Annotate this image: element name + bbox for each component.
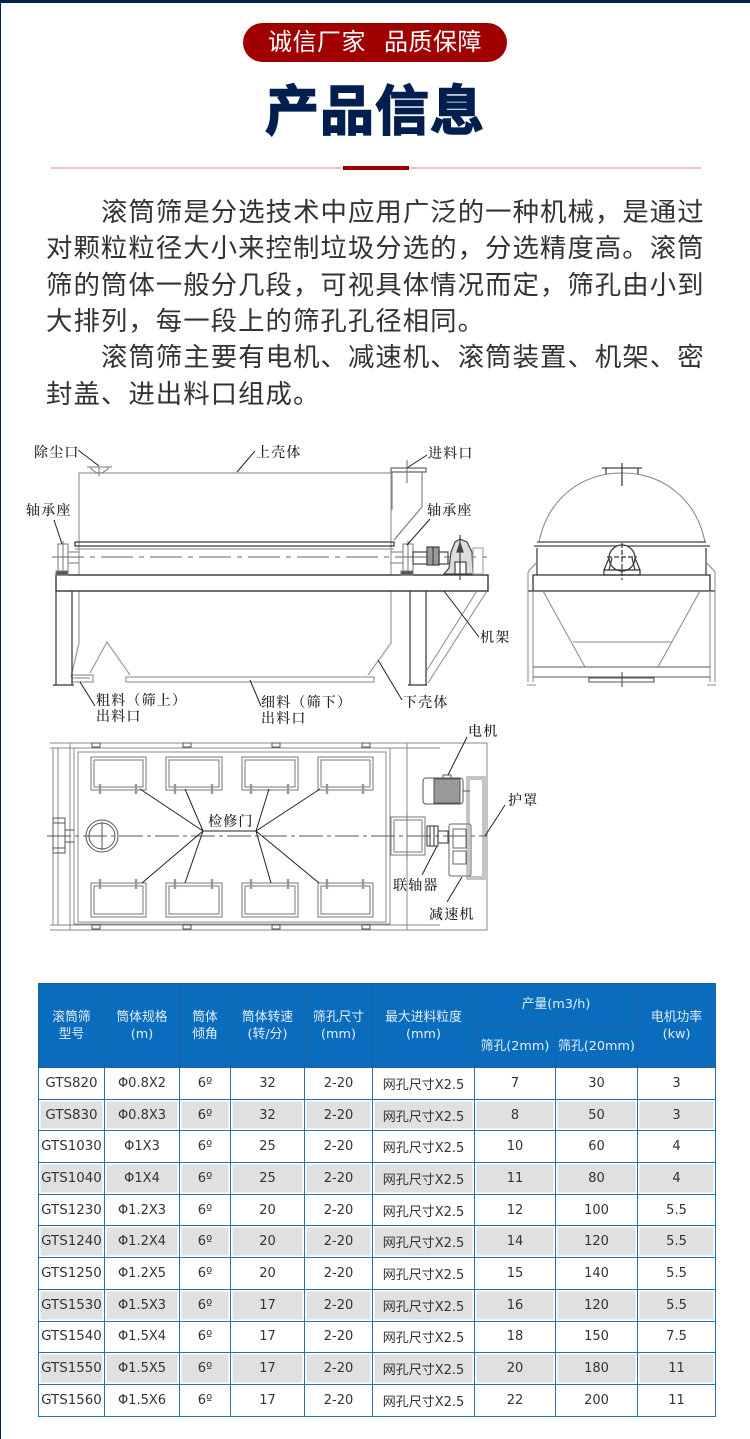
specification table: Φ1X4: [124, 1171, 160, 1186]
specification table: GTS830: [45, 1108, 98, 1123]
specification table: GTS1250: [41, 1266, 102, 1281]
specification table: 30: [588, 1076, 605, 1091]
end view flange and body: [534, 542, 710, 575]
specification table: 11: [668, 1361, 685, 1376]
specification table: (mm): [321, 1026, 356, 1042]
specification table: 50: [588, 1108, 605, 1123]
specification table: 2-20: [324, 1329, 353, 1344]
plan view drawing: [47, 721, 538, 930]
specification table: 17: [259, 1298, 276, 1313]
specification table: 筛孔尺寸: [313, 1010, 364, 1024]
specification table: 产量(m3/h): [522, 997, 590, 1012]
specification table: 6º: [198, 1139, 212, 1154]
specification table: 2-20: [324, 1108, 353, 1123]
specification table: 8: [511, 1108, 519, 1123]
specification table: 25: [259, 1171, 276, 1186]
specification table: 60: [588, 1139, 605, 1154]
specification table: 网孔尺寸X2.5: [383, 1363, 464, 1378]
specification table: GTS1530: [41, 1298, 102, 1313]
plan labels: 电机: [468, 721, 498, 741]
specification table: (mm): [406, 1026, 441, 1042]
specification table: 网孔尺寸X2.5: [383, 1331, 464, 1346]
specification table: 6º: [198, 1171, 212, 1186]
plan labels: 检修门: [208, 811, 254, 831]
slogan pill: 诚信厂家 品质保障: [268, 29, 482, 56]
plan labels: 护罩: [508, 790, 538, 810]
specification table: GTS820: [45, 1076, 98, 1091]
specification table: 20: [259, 1266, 276, 1281]
dust port: [87, 467, 112, 476]
specification table: 2-20: [324, 1298, 353, 1313]
plan labels: 减速机: [429, 904, 475, 924]
end view base: [533, 667, 710, 687]
specification table: 11: [507, 1171, 523, 1186]
specification table: [38, 983, 716, 1417]
end view drum bearing: [604, 543, 640, 580]
specification table: 20: [259, 1203, 276, 1218]
end view beam: [528, 575, 715, 591]
specification table: 2-20: [324, 1076, 353, 1091]
specification table: Φ1.2X5: [118, 1266, 166, 1281]
intro text: 滚筒筛是分选技术中应用广泛的一种机械，是通过: [101, 197, 705, 227]
inspection doors: [91, 757, 373, 917]
specification table: 6º: [198, 1076, 212, 1091]
intro text: 封盖、进出料口组成。: [46, 378, 320, 408]
upper and lower shell outline: [71, 473, 394, 682]
specification table: 2-20: [324, 1266, 353, 1281]
specification table: 5.5: [666, 1234, 687, 1249]
specification table: 筒体规格: [116, 1010, 168, 1024]
specification table: GTS1550: [41, 1361, 102, 1376]
end elevation drawing: [527, 463, 716, 687]
specification table: 倾角: [192, 1026, 218, 1042]
specification table: 32: [259, 1076, 276, 1091]
left navy edge: [0, 0, 1, 1439]
specification table: 筛孔(2mm): [481, 1039, 549, 1054]
specification table: 5.5: [666, 1203, 687, 1218]
specification table: 3: [672, 1076, 681, 1091]
specification table: 16: [507, 1298, 523, 1313]
side view centre line: [52, 556, 493, 558]
dome: [539, 473, 705, 542]
discharge flange circle: [86, 820, 118, 852]
end view legs: [527, 563, 716, 685]
intro text: 对颗粒粒径大小来控制垃圾分选的，分选精度高。滚筒: [46, 233, 705, 263]
specification table: Φ1.5X6: [118, 1393, 166, 1408]
technical drawings: [26, 442, 716, 930]
specification table: 17: [259, 1329, 276, 1344]
rail markers: [92, 743, 370, 929]
side view labels: 出料口: [96, 706, 142, 726]
specification table: Φ1.5X3: [118, 1298, 166, 1313]
specification table: GTS1560: [41, 1393, 102, 1408]
specification table: 6º: [198, 1234, 212, 1249]
side view labels: 上壳体: [256, 442, 302, 462]
specification table: 6º: [198, 1361, 212, 1376]
specification table: 2-20: [324, 1203, 353, 1218]
specification table: (kw): [663, 1026, 690, 1042]
specification table: 200: [584, 1393, 609, 1408]
specification table: 140: [584, 1266, 609, 1281]
specification table: 2-20: [324, 1139, 353, 1154]
plan outline: [50, 743, 487, 930]
specification table: 最大进料粒度: [385, 1010, 462, 1024]
specification table: (转/分): [248, 1026, 287, 1042]
bearings: [56, 541, 413, 575]
side view labels: 下壳体: [403, 692, 449, 712]
side view frame beam and legs: [53, 542, 488, 685]
specification table: 6º: [198, 1203, 212, 1218]
plan leader lines: [140, 737, 505, 902]
side view labels: 出料口: [261, 708, 307, 728]
side view labels: 除尘口: [34, 442, 80, 462]
specification table: 22: [507, 1393, 523, 1408]
specification table: 15: [507, 1266, 523, 1281]
specification table: 网孔尺寸X2.5: [383, 1395, 464, 1410]
intro text: [46, 197, 705, 408]
intro text: 滚筒筛主要有电机、减速机、滚筒装置、机架、密: [101, 342, 705, 372]
specification table: 6º: [198, 1393, 212, 1408]
specification table: 17: [259, 1393, 276, 1408]
specification table: Φ0.8X2: [118, 1076, 166, 1091]
specification table: 5.5: [666, 1266, 687, 1281]
specification table: GTS1240: [41, 1234, 102, 1249]
specification table: 筒体转速: [242, 1010, 293, 1024]
specification table: (m): [131, 1026, 153, 1042]
specification table: 2-20: [324, 1171, 353, 1186]
specification table: 6º: [198, 1108, 212, 1123]
specification table: 11: [668, 1393, 685, 1408]
diagonal brace: [427, 591, 487, 683]
hopper: [543, 591, 700, 667]
feed inlet: [391, 460, 426, 540]
specification table: GTS1030: [41, 1139, 102, 1154]
plan labels: [208, 721, 538, 924]
specification table: Φ1.2X4: [118, 1234, 166, 1249]
specification table: 2-20: [324, 1361, 353, 1376]
feed box plan: [391, 812, 425, 860]
intro text: 筛的筒体一般分几段，可视具体情况而定，筛孔由小到: [46, 270, 705, 300]
specification table: 100: [584, 1203, 609, 1218]
specification table: 滚筒筛: [52, 1010, 91, 1024]
specification table: 2-20: [324, 1234, 353, 1249]
specification table: 180: [584, 1361, 609, 1376]
drive assembly side view: [413, 535, 483, 580]
specification table: 17: [259, 1361, 276, 1376]
side view labels: 机架: [480, 627, 510, 647]
specification table: 网孔尺寸X2.5: [383, 1300, 464, 1315]
specification table: 6º: [198, 1298, 212, 1313]
specification table: GTS1040: [41, 1171, 102, 1186]
specification table: GTS1230: [41, 1203, 102, 1218]
specification table: 150: [584, 1329, 609, 1344]
plan centre line: [47, 835, 487, 837]
left bearing plan: [53, 818, 74, 853]
specification table: Φ1.5X4: [118, 1329, 166, 1344]
motor: [423, 775, 470, 804]
specification table: 20: [507, 1361, 523, 1376]
specification table: 网孔尺寸X2.5: [383, 1268, 464, 1283]
specification table: 4: [672, 1171, 681, 1186]
guard plan: [467, 777, 485, 879]
specification table: 网孔尺寸X2.5: [383, 1173, 464, 1188]
specification table: 3: [672, 1108, 681, 1123]
specification table: 14: [507, 1234, 523, 1249]
specification table: 网孔尺寸X2.5: [383, 1078, 464, 1093]
side view labels: 进料口: [428, 443, 474, 463]
specification table: 网孔尺寸X2.5: [383, 1236, 464, 1251]
side view leader lines: [54, 450, 479, 706]
specification table: 120: [584, 1298, 609, 1313]
specification table: 80: [588, 1171, 605, 1186]
side view labels: [26, 442, 510, 728]
specification table: 7: [511, 1076, 519, 1091]
specification table: 10: [507, 1139, 523, 1154]
specification table: 18: [507, 1329, 523, 1344]
specification table: 6º: [198, 1266, 212, 1281]
side view labels: 轴承座: [427, 500, 473, 520]
title divider: [51, 166, 701, 170]
specification table: 7.5: [666, 1329, 687, 1344]
specification table: 网孔尺寸X2.5: [383, 1205, 464, 1220]
top navy bar: [0, 0, 750, 3]
specification table: Φ1X3: [124, 1139, 160, 1154]
specification table: 筒体: [192, 1010, 218, 1024]
specification table: 筛孔(20mm): [558, 1039, 635, 1054]
specification table: 32: [259, 1108, 276, 1123]
specification table: 4: [672, 1139, 681, 1154]
plan labels: 联轴器: [393, 875, 439, 895]
specification table: Φ1.2X3: [118, 1203, 166, 1218]
intro text: 大排列，每一段上的筛孔孔径相同。: [46, 306, 485, 336]
specification table: 电机功率: [651, 1010, 702, 1024]
slogan pill: [243, 23, 507, 62]
specification table: 20: [259, 1234, 276, 1249]
specification table: Φ1.5X5: [118, 1361, 166, 1376]
specification table: 6º: [198, 1329, 212, 1344]
reducer plan: [449, 824, 471, 876]
specification table: 2-20: [324, 1393, 353, 1408]
specification table: 网孔尺寸X2.5: [383, 1141, 464, 1156]
specification table: 5.5: [666, 1298, 687, 1313]
specification table: 网孔尺寸X2.5: [383, 1110, 464, 1125]
title: 产品信息: [265, 82, 485, 142]
specification table: GTS1540: [41, 1329, 102, 1344]
specification table: 120: [584, 1234, 609, 1249]
side view labels: 轴承座: [26, 500, 72, 520]
side view labels: 细料（筛下）: [261, 692, 352, 712]
coupling plan: [427, 826, 448, 846]
specification table: 型号: [59, 1026, 84, 1042]
specification table: Φ0.8X3: [118, 1108, 166, 1123]
specification table: 25: [259, 1139, 276, 1154]
specification table: 12: [507, 1203, 523, 1218]
top port: [602, 463, 642, 486]
side view labels: 粗料（筛上）: [96, 690, 187, 710]
